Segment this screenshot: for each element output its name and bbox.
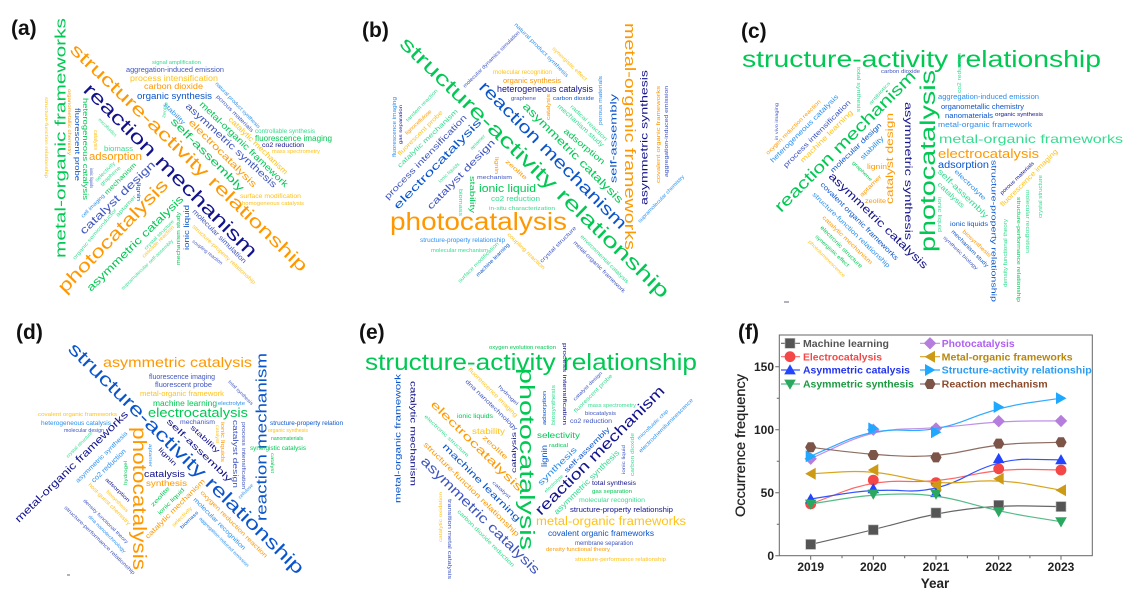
panel: (a) word cloud: microfluidics bbox=[97, 117, 118, 139]
panel: (a) word cloud: ionic liquid bbox=[182, 205, 191, 250]
panel: (d) word cloud: dna nanotechnology bbox=[87, 514, 127, 555]
panel: (e) word cloud: fluorescence imaging bbox=[467, 367, 518, 419]
panel: (b) word cloud: catalysis bbox=[546, 93, 552, 120]
panel: (e) word cloud: density functional theory bbox=[546, 547, 610, 553]
panel: (e) word cloud: lignin bbox=[539, 445, 549, 467]
panel: (b) word cloud: metal-organic framework bbox=[572, 240, 626, 295]
panel: (d) word cloud: total synthesis bbox=[227, 379, 255, 407]
word: photocatalysis: photocatalysis bbox=[128, 427, 149, 570]
word: photocatalysis: photocatalysis bbox=[515, 368, 538, 550]
panel: (c) word cloud: ionic liquids bbox=[950, 221, 989, 228]
panel: (e) word cloud: catalytic mechanism bbox=[409, 381, 418, 486]
panel: (e) word cloud: catalyst bbox=[491, 480, 512, 501]
panel: (b) word cloud: fluorescence imaging bbox=[392, 97, 398, 157]
y axis tick labels: 150 bbox=[754, 360, 774, 374]
panel: (c) word cloud bbox=[741, 20, 1123, 302]
panel: (c) word cloud: metal-organic framework bbox=[938, 122, 1033, 129]
panel: (e) word cloud: molecular recognition bbox=[579, 497, 645, 504]
panel: (a) word cloud: lignin bbox=[135, 183, 141, 201]
panel: (b) word cloud: asymmetric synthesis bbox=[640, 70, 651, 205]
panel: (e) word cloud: self-assembly bbox=[563, 426, 612, 474]
panel: (e) word cloud: synthesis bbox=[535, 445, 579, 487]
panel: (c) word cloud: metal-organic frameworks bbox=[939, 132, 1123, 146]
panel: (a) word cloud: mechanism study bbox=[176, 212, 182, 265]
legend item: Electrocatalysis: Electrocatalysis bbox=[803, 351, 882, 363]
panel: (d) word cloud: co2 reduction bbox=[91, 448, 128, 484]
word: metal-organic frameworks: metal-organic frameworks bbox=[13, 409, 131, 525]
panel: (a) word cloud: electrocatalysis bbox=[186, 117, 259, 190]
word: photocatalysis: photocatalysis bbox=[390, 208, 567, 236]
panel: (a) word cloud: co2 reduction bbox=[262, 142, 304, 149]
panel: (d) word cloud: aggregation-induced emission bbox=[198, 516, 250, 569]
panel: (e) word cloud: biocatalysis bbox=[585, 411, 616, 417]
panel: (b) word cloud: in-situ characterization bbox=[489, 206, 555, 212]
panel: (d) word cloud: synthesis bbox=[146, 478, 187, 488]
panel: (e) word cloud: process intensification bbox=[561, 343, 567, 425]
panel: (b) word cloud: co2 reduction bbox=[491, 196, 540, 203]
panel: (c) word cloud: machine learning bbox=[799, 109, 855, 164]
panel: (e) word cloud: carbon dioxide bbox=[630, 433, 636, 476]
y axis title: Occurrence frequency bbox=[732, 374, 748, 517]
x axis tick labels: 2019 bbox=[797, 560, 824, 574]
panel: (a) word cloud: structure-property relationship bbox=[191, 224, 256, 286]
legend item: Machine learning: Machine learning bbox=[803, 338, 889, 350]
panel: (a) word cloud: zeolite bbox=[161, 101, 170, 118]
x axis tick labels: 2022 bbox=[985, 560, 1012, 574]
panel: (c) word cloud: photoluminescence bbox=[807, 239, 846, 279]
panel: (a) word cloud: fluorescence imaging bbox=[255, 133, 332, 143]
panel: (c) word cloud: total synthesis bbox=[855, 67, 861, 113]
word: reaction mechanism: reaction mechanism bbox=[475, 77, 631, 233]
panel: (a) word cloud: biomass bbox=[104, 146, 134, 153]
panel: (a) word cloud: organometallic chemistry bbox=[66, 89, 72, 156]
panel: (b) word cloud: gas separation bbox=[398, 105, 404, 144]
x axis tick labels bbox=[797, 560, 1075, 574]
panel: (a) word cloud: process intensification bbox=[130, 74, 218, 83]
panel: (d) word cloud: biosynthesis bbox=[105, 489, 130, 514]
y axis tick labels bbox=[754, 360, 774, 563]
panel: (a) word cloud: coupling reaction bbox=[191, 239, 224, 267]
series: Reaction mechanism bbox=[805, 437, 1067, 462]
panel: (a) word cloud: crystal structure bbox=[143, 219, 176, 251]
panel: (e) word cloud: metal-organic framework bbox=[393, 373, 403, 503]
panel: (e) word cloud: mass spectrometry bbox=[588, 403, 636, 409]
word: reaction mechanism: reaction mechanism bbox=[79, 80, 261, 262]
panel: (e) word cloud: total synthesis bbox=[592, 480, 637, 487]
x axis title: Year bbox=[921, 576, 950, 591]
panel: (b) word cloud: ionic liquid bbox=[479, 183, 536, 195]
panel: (a) word cloud: porous materials bbox=[215, 94, 254, 134]
panel: (c) word cloud: catalyst design bbox=[885, 113, 896, 204]
panel: (b) word cloud: lignin bbox=[493, 157, 499, 174]
panel: (c) word cloud: electronic structure bbox=[819, 225, 863, 270]
panel: (c) word cloud: stability bbox=[859, 135, 886, 161]
word: structure-activity relationship: structure-activity relationship bbox=[66, 39, 312, 276]
x axis tick labels: 2023 bbox=[1048, 560, 1075, 574]
panel: (b) word cloud: organic synthesis bbox=[503, 76, 561, 85]
word: asymmetric catalysis: asymmetric catalysis bbox=[418, 453, 543, 577]
panel: (d) word cloud: metal-organic framework bbox=[140, 391, 225, 398]
panel: (b) word cloud: machine learning bbox=[475, 242, 511, 278]
panel: (b) word cloud: crystal structure bbox=[539, 226, 578, 264]
y axis tick labels: 0 bbox=[767, 549, 774, 563]
panel: (b) word cloud: stability bbox=[468, 176, 475, 214]
word: structure-activity relationship: structure-activity relationship bbox=[742, 46, 1101, 72]
panel: (b) word cloud: ionic liquids bbox=[437, 161, 462, 184]
panel: (c) word cloud: catalysis bbox=[936, 181, 966, 210]
panel: (c) word cloud: co2 reduction bbox=[957, 53, 963, 93]
panel: (b) word cloud: synergistic effect bbox=[551, 46, 588, 83]
panel: (d) word cloud: lignin bbox=[157, 446, 178, 468]
panel: (d) word cloud: selectivity bbox=[171, 505, 194, 528]
panel: (b) word cloud: catalyst design bbox=[425, 138, 498, 212]
legend item: Metal-organic frameworks: Metal-organic frameworks bbox=[942, 351, 1073, 363]
panel: (e) word cloud: zeolite bbox=[481, 434, 509, 462]
panel: (e) word cloud: gas separation bbox=[592, 489, 632, 495]
panel: (e) word cloud: catalysis bbox=[511, 431, 518, 473]
panel: (b) word cloud bbox=[362, 19, 686, 303]
panel: (e) word cloud: radical bbox=[549, 443, 568, 449]
panel: (a) word cloud: catalyst design bbox=[78, 159, 158, 237]
panel: (c) word cloud: lignin bbox=[867, 164, 887, 171]
panel: (c) word cloud: organometallic chemistry bbox=[941, 104, 1025, 111]
panel: (a) word cloud: self-assembly bbox=[168, 116, 247, 195]
panel: (c) word cloud: structure-performance relationship bbox=[1015, 197, 1021, 302]
panel: (d) word cloud: density functional theory bbox=[82, 498, 130, 546]
panel: (e) word cloud: membrane separation bbox=[575, 541, 633, 547]
panel: (a) word cloud: asymmetric catalysis bbox=[85, 193, 187, 294]
panel: (c) word cloud: molecular design bbox=[830, 122, 883, 174]
panel: (a) word cloud: ionic liquids bbox=[89, 168, 94, 189]
panel: (d) word cloud bbox=[13, 321, 343, 578]
panel: (c) word cloud: self-assembly bbox=[936, 167, 990, 220]
panel: (a) word cloud: organic synthesis bbox=[137, 91, 213, 101]
panel: (b) word cloud: carbon dioxide bbox=[553, 96, 594, 102]
panel: (a) word cloud: signal amplification bbox=[152, 60, 201, 66]
panel: (c) word cloud: nanomaterials bbox=[945, 113, 994, 120]
series: Metal-organic frameworks bbox=[805, 464, 1066, 496]
panel: (d) word cloud: catalyst design bbox=[231, 420, 238, 488]
panel: (d) word cloud: adsorption bbox=[104, 477, 131, 504]
panel: (a) word cloud: carbon dioxide bbox=[144, 81, 203, 91]
panel: (a) word cloud: homogeneous catalysis bbox=[242, 201, 304, 207]
panel: (a) word cloud: fluorescent probe bbox=[73, 108, 82, 181]
panel: (a) word cloud: supramolecular self-assembly bbox=[120, 238, 175, 291]
series: Electrocatalysis bbox=[805, 463, 1066, 509]
heading: (a): (a) bbox=[11, 17, 37, 40]
panel: (d) word cloud: oxygen reduction reaction bbox=[199, 489, 269, 560]
panel: (a) word cloud: aptamer bbox=[115, 194, 138, 218]
panel: (e) word cloud: structure-function relationship bbox=[422, 440, 521, 538]
panel: (c) word cloud: porous materials bbox=[999, 161, 1036, 196]
panel: (e) word cloud: catalytic oxidation bbox=[438, 492, 444, 542]
panel: (d) word cloud: catalytic mechanism bbox=[144, 478, 207, 540]
panel: (d) word cloud: electrocatalysis bbox=[148, 406, 248, 420]
panel: (d) word cloud: asymmetric synthesis bbox=[74, 430, 129, 484]
panel: (e) word cloud: ionic liquids bbox=[457, 414, 493, 420]
panel: (e) word cloud: carbon dioxide reduction bbox=[456, 509, 515, 569]
legend item: Reaction mechanism: Reaction mechanism bbox=[942, 379, 1048, 391]
word: metal-organic frameworks: metal-organic frameworks bbox=[536, 516, 686, 528]
panel: (e) word cloud: electrochemiluminescence bbox=[638, 398, 695, 454]
panel: (a) word cloud: metal-organic framework bbox=[198, 99, 291, 190]
panel: (d) word cloud: covalent organic frameworks bbox=[38, 412, 117, 418]
panel: (c) word cloud: covalent organic frameworks bbox=[819, 181, 900, 262]
panel: (a) word cloud: adsorption bbox=[89, 151, 142, 163]
panel: (d) word cloud: organic synthesis bbox=[268, 428, 309, 434]
panel: (b) word cloud: natural product synthesis bbox=[513, 22, 569, 79]
word: metal-organic frameworks: metal-organic frameworks bbox=[52, 18, 70, 258]
panel: (c) word cloud: heterogeneous catalysis bbox=[769, 93, 841, 164]
panel: (c) word cloud: oxygen reduction reaction bbox=[765, 99, 822, 156]
word: reaction mechanism: reaction mechanism bbox=[532, 383, 668, 519]
panel: (b) word cloud: molecular dynamics simulation bbox=[462, 30, 522, 89]
panel: (a) word cloud: aggregation-induced emission bbox=[126, 67, 224, 74]
panel: (c) word cloud: mechanism study bbox=[950, 229, 989, 269]
panel: (c) word cloud: synthetic biology bbox=[942, 235, 979, 272]
legend item: Asymmetric synthesis: Asymmetric synthesis bbox=[803, 379, 914, 391]
heading: (e): (e) bbox=[359, 321, 385, 344]
panel: (d) word cloud: hydrogel bbox=[123, 461, 129, 485]
panel: (d) word cloud: ionic liquids bbox=[219, 422, 225, 462]
word: structure-activity relationship: structure-activity relationship bbox=[64, 338, 309, 578]
panel: (b) word cloud: molecular recognition bbox=[493, 70, 552, 76]
panel: (c) word cloud: catalytic mechanism bbox=[821, 215, 873, 266]
x axis tick labels: 2021 bbox=[923, 560, 950, 574]
panel: (e) word cloud: dna nanotechnology bbox=[464, 379, 518, 432]
panel: (a) word cloud: asymmetric synthesis bbox=[183, 101, 279, 191]
panel: (c) word cloud: structure-function relationship bbox=[811, 191, 891, 270]
panel: (a) word cloud: graphene bbox=[99, 165, 122, 187]
panel: (a) word cloud: selectivity bbox=[94, 160, 117, 183]
panel: (d) word cloud: fluorescent probe bbox=[155, 382, 212, 389]
panel: (a) word cloud: organic semiconductor bbox=[72, 207, 119, 261]
panel: (d) word cloud: heterogeneous catalysis bbox=[41, 421, 111, 427]
word: asymmetric catalysis: asymmetric catalysis bbox=[103, 354, 252, 370]
heading: (c): (c) bbox=[741, 20, 767, 43]
panel: (a) word cloud: catalysis bbox=[92, 130, 98, 150]
panel: (a) word cloud: natural product synthesis bbox=[214, 81, 261, 130]
panel: (d) word cloud: electrolyte bbox=[218, 401, 245, 407]
word: metal-organic frameworks: metal-organic frameworks bbox=[621, 23, 638, 250]
panel: (a) word cloud: molecular simulation bbox=[191, 208, 247, 265]
legend item: Photocatalysis: Photocatalysis bbox=[942, 338, 1015, 350]
panel: (c) word cloud: carbon dioxide bbox=[881, 69, 920, 75]
panel: (a) word cloud: controllable synthesis bbox=[255, 129, 315, 135]
panel: (e) word cloud: machine learning bbox=[441, 441, 523, 523]
panel: (d) word cloud: mechanism bbox=[180, 420, 215, 426]
panel: (b) word cloud: mechanism bbox=[477, 175, 513, 181]
panel: (d) word cloud: ionic liquid bbox=[157, 487, 186, 516]
panel: (b) word cloud: aggregation-induced emission bbox=[664, 86, 670, 177]
panel: (d) word cloud: aptamer bbox=[147, 444, 153, 468]
x axis tick labels: 2020 bbox=[860, 560, 887, 574]
panel: (c) word cloud: aggregation-induced emission bbox=[938, 94, 1039, 101]
panel: (c) word cloud: adsorption bbox=[938, 160, 989, 171]
panel: (e) word cloud: ionic liquid bbox=[621, 445, 627, 474]
panel: (d) word cloud: stability bbox=[189, 424, 221, 455]
panel: (b) word cloud: surface modification bbox=[457, 241, 500, 284]
panel: (b) word cloud: biomass bbox=[457, 189, 463, 216]
panel: (e) word cloud: microfluidic chip bbox=[636, 408, 670, 441]
panel: (c) word cloud: electrocatalysis bbox=[938, 147, 1039, 161]
panel: (e) word cloud: fluorescent probe bbox=[573, 373, 614, 414]
panel: (b) word cloud: coupling reaction bbox=[506, 232, 546, 271]
panel: (e) word cloud: hydrogel bbox=[497, 384, 519, 407]
panel: (e) word cloud: adsorption bbox=[542, 391, 548, 425]
series: Asymmetric synthesis bbox=[805, 490, 1067, 528]
heading: (f): (f) bbox=[738, 321, 759, 344]
series: Photocatalysis bbox=[804, 415, 1067, 465]
panel: (e) word cloud bbox=[359, 321, 697, 580]
panel: (c) word cloud: crystal structure bbox=[1038, 175, 1044, 218]
panel: (e) word cloud: structure-performance relationship bbox=[575, 557, 666, 563]
panel: (c) word cloud: ionic liquid bbox=[936, 197, 942, 232]
panel: (b) word cloud: lignocellulose bbox=[404, 109, 433, 136]
panel: (a) word cloud: structure-function relationship bbox=[43, 97, 49, 178]
panel: (d) word cloud: catalysis bbox=[144, 469, 186, 479]
panel: (c) word cloud: aptamer bbox=[859, 174, 883, 198]
panel: (b) word cloud: graphene bbox=[511, 96, 536, 102]
panel: (b) word cloud: adsorption bbox=[562, 126, 607, 167]
panel: (d) word cloud: catalyst bbox=[214, 425, 220, 444]
panel: (b) word cloud: porous materials bbox=[598, 76, 604, 125]
panel: (a) word cloud bbox=[11, 17, 332, 297]
panel: (d) word cloud: machine learning bbox=[153, 399, 217, 408]
panel: (b) word cloud: zeolite bbox=[504, 159, 528, 182]
panel: (d) word cloud: crystal structure bbox=[65, 430, 94, 459]
panel: (b) word cloud: catalytic mechanism bbox=[397, 108, 460, 169]
legend item: Asymmetric catalysis: Asymmetric catalysis bbox=[803, 365, 910, 377]
panel: (d) word cloud: zeolite bbox=[150, 486, 172, 508]
panel: (d) word cloud: structure-performance relationship bbox=[63, 505, 136, 576]
panel: (e) word cloud: stability bbox=[472, 427, 505, 436]
panel: (b) word cloud: fluorescent probe bbox=[396, 109, 445, 157]
word: structure-activity relationship: structure-activity relationship bbox=[365, 349, 697, 375]
word: reaction mechanism: reaction mechanism bbox=[771, 67, 920, 216]
panel: (c) word cloud: structure-property relationship bbox=[990, 160, 999, 302]
panel: (e) word cloud: co2 reduction bbox=[570, 419, 612, 425]
panel: (c) word cloud: graphene bbox=[851, 160, 874, 183]
panel: (d) word cloud: molecular recognition bbox=[192, 496, 247, 552]
panel: (a) word cloud: cell imaging bbox=[80, 193, 106, 219]
panel: (c) word cloud: antibiotics bbox=[868, 80, 892, 106]
panel: (c) word cloud: synergistic effect bbox=[814, 234, 850, 269]
panel: (b) word cloud: environmental catalysis bbox=[579, 234, 630, 285]
panel: (d) word cloud: cellulose bbox=[237, 483, 255, 500]
heading: (b): (b) bbox=[362, 19, 389, 42]
panel: (a) word cloud: stability bbox=[162, 101, 187, 127]
panel: (b) word cloud: aptamer bbox=[469, 133, 487, 151]
panel: (a) word cloud: heterogeneous catalysis bbox=[81, 98, 90, 200]
panel: (c) word cloud: density functional theory bbox=[1003, 219, 1009, 287]
panel: (d) word cloud: structure-property relation bbox=[270, 421, 343, 427]
panel: (c) word cloud: asymmetric synthesis bbox=[902, 102, 913, 240]
y axis tick labels: 50 bbox=[761, 486, 774, 500]
panel: (b) word cloud: molecular mechanism bbox=[431, 248, 488, 254]
panel: (d) word cloud: process intensification bbox=[240, 422, 246, 489]
panel: (b) word cloud: process intensification bbox=[382, 112, 469, 201]
panel: (c) word cloud: molecular recognition bbox=[1024, 190, 1030, 253]
panel: (c) word cloud: in vivo imaging bbox=[774, 102, 779, 140]
panel: (b) word cloud: heterogeneous catalysis bbox=[497, 84, 593, 94]
panel: (b) word cloud: supramolecular chemistry bbox=[637, 174, 686, 224]
panel: (e) word cloud: covalent organic frameworks bbox=[548, 529, 654, 538]
panel: (e) word cloud: asymmetric synthesis bbox=[552, 448, 621, 516]
panel: (c) word cloud: asymmetric catalysis bbox=[826, 171, 930, 272]
word: structure-activity relationship: structure-activity relationship bbox=[395, 33, 674, 303]
panel: (e) word cloud: structure-property relationship bbox=[570, 505, 673, 514]
panel: (d) word cloud: host-guest chemistry bbox=[87, 482, 131, 527]
panel: (d) word cloud: synergistic catalysis bbox=[250, 446, 306, 452]
panel: (a) word cloud: catalytic mechanism bbox=[227, 115, 290, 176]
panel: (e) word cloud: selectivity bbox=[537, 431, 580, 440]
panel: (e) word cloud: oxygen evolution reaction bbox=[489, 345, 556, 351]
series: Asymmetric catalysis bbox=[805, 453, 1067, 503]
panel: (a) word cloud: mechanism bbox=[103, 161, 139, 196]
legend bbox=[781, 337, 1092, 391]
panel: (e) word cloud: transition metal catalysis bbox=[446, 499, 452, 580]
panel: (d) word cloud: self-assembly bbox=[165, 416, 235, 485]
word: photocatalysis: photocatalysis bbox=[916, 70, 940, 252]
panel: (c) word cloud: process intensification bbox=[782, 99, 853, 169]
panel: (a) word cloud: surface modification bbox=[240, 194, 301, 200]
panel: (b) word cloud: mechanism study bbox=[556, 103, 606, 149]
panel: (b) word cloud: covalent organic frameworks bbox=[656, 86, 662, 183]
panel: (b) word cloud: electrocatalysis bbox=[392, 116, 485, 212]
panel: (c) word cloud: organic synthesis bbox=[995, 112, 1043, 118]
word: reaction mechanism: reaction mechanism bbox=[255, 353, 271, 521]
panel: (c) word cloud: biosynthesis bbox=[961, 229, 992, 259]
panel: (c) word cloud: fluorescence imaging bbox=[999, 148, 1060, 208]
panel: (b) word cloud: asymmetric catalysis bbox=[520, 101, 626, 206]
panel: (a) word cloud: cascade reaction bbox=[141, 225, 176, 259]
series: Machine learning bbox=[806, 500, 1066, 549]
panel: (e) word cloud: biosynthesis bbox=[551, 385, 557, 425]
panel: (e) word cloud: electrolyte bbox=[543, 473, 565, 494]
panel: (d) word cloud: catalyst bbox=[269, 453, 275, 474]
panel: (e) word cloud: electronic structure bbox=[423, 414, 470, 459]
y axis tick labels: 100 bbox=[754, 423, 774, 437]
panel: (d) word cloud: molecular design bbox=[64, 428, 104, 434]
panel: (e) word cloud: electrocatalysis bbox=[428, 399, 525, 495]
panel: (d) word cloud: biomass bbox=[179, 510, 200, 530]
legend item: Structure-activity relationship: Structure-activity relationship bbox=[942, 365, 1092, 377]
panel: (b) word cloud: self-assembly bbox=[609, 94, 620, 183]
series: Structure-activity relationship bbox=[806, 392, 1066, 462]
panel: (a) word cloud: mass spectrometry bbox=[272, 149, 320, 155]
panel: (d) word cloud: fluorescence imaging bbox=[149, 374, 215, 381]
panel: (b) word cloud: radical reaction bbox=[569, 104, 608, 142]
panel: (f) line chart of occurrence frequency bbox=[732, 321, 1092, 591]
panel: (d) word cloud: nanomaterials bbox=[271, 436, 304, 442]
panel: (b) word cloud: tandem reaction bbox=[405, 88, 439, 123]
panel: (c) word cloud: zeolite bbox=[865, 199, 887, 205]
chart frame and axes bbox=[775, 335, 1092, 560]
heading: (d): (d) bbox=[16, 321, 43, 344]
panel: (e) word cloud: catalyst design bbox=[572, 370, 604, 402]
word: photocatalysis: photocatalysis bbox=[53, 175, 172, 297]
panel: (b) word cloud: structure-property relationship bbox=[420, 238, 506, 244]
panel: (c) word cloud: electrolyte bbox=[953, 168, 988, 202]
